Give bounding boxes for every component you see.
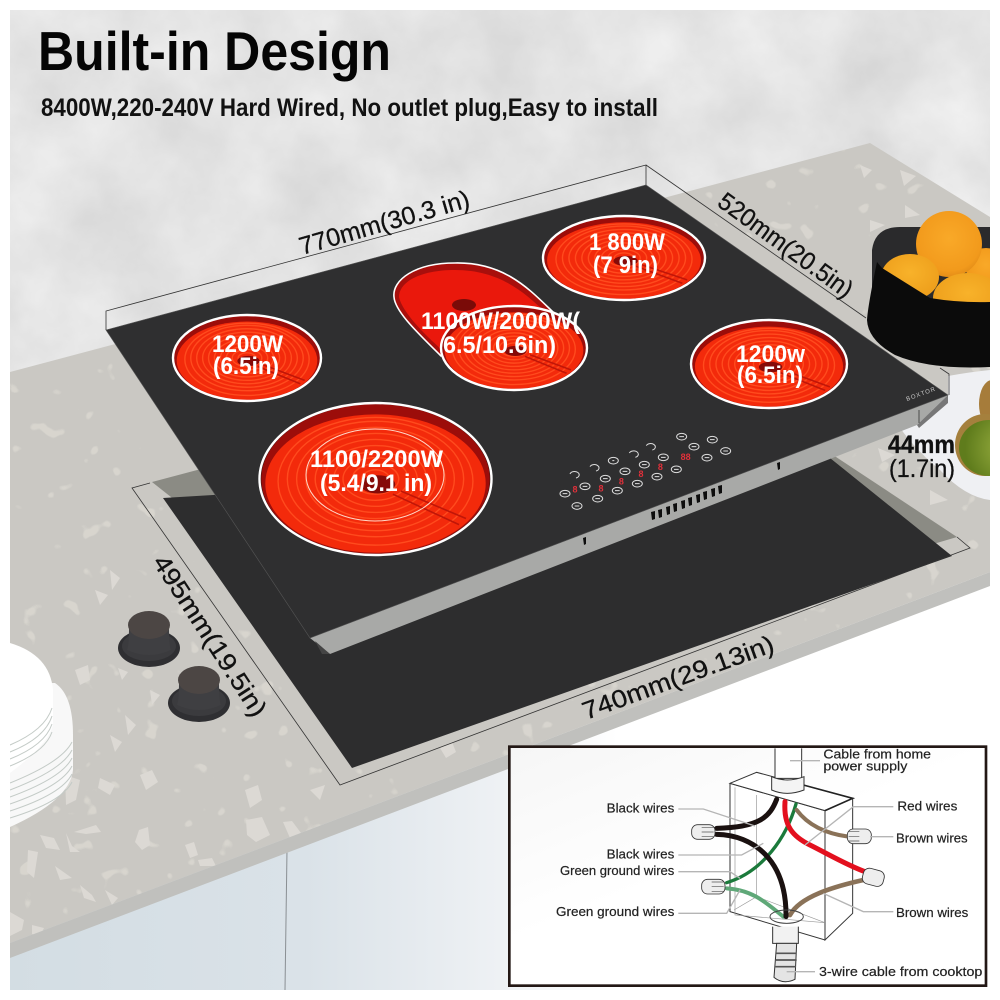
title: Built-in Design bbox=[38, 20, 391, 82]
wire nuts bbox=[692, 825, 886, 894]
burner: rear 1800W: (7 9in) bbox=[593, 252, 658, 279]
wiring labels: 3-wire cable from cooktop bbox=[819, 965, 982, 979]
floor clamp bbox=[770, 910, 803, 923]
dimension label: thickness 44mm: 44mm bbox=[888, 431, 955, 459]
touch control panel: 8 bbox=[572, 485, 577, 495]
wiring labels: power supply bbox=[823, 760, 908, 774]
wiring labels: Black wires bbox=[607, 848, 674, 862]
touch control panel: 8 bbox=[619, 476, 624, 486]
touch control panel: 8 bbox=[598, 483, 603, 493]
wiring labels: Brown wires bbox=[896, 832, 968, 846]
knob 1 bbox=[118, 611, 180, 667]
burner: centre dual 1100W/2000W: 1100W/2000W( bbox=[421, 308, 580, 335]
burner: front left 1100/2200W: 1100/2200W bbox=[310, 446, 443, 473]
burner: right 1200w: (6.5in) bbox=[737, 362, 803, 389]
cooktop glass bbox=[106, 185, 948, 638]
wires bbox=[717, 799, 865, 917]
dimension label: cutout depth 495mm: 495mm(19.5in) bbox=[147, 550, 272, 722]
subtitle: 8400W,220-240V Hard Wired, No outlet plug,Easy to install bbox=[41, 94, 658, 122]
burner: front left 1100/2200W: (5.4/9.1 in) bbox=[320, 470, 432, 497]
wiring labels bbox=[556, 747, 982, 979]
burner: rear left 1200W: 1200W bbox=[212, 331, 283, 358]
brand mark: BOXTOR bbox=[906, 387, 937, 403]
leader lines bbox=[678, 761, 893, 972]
dimension label: depth 520mm: 520mm(20.5in) bbox=[712, 187, 858, 304]
touch control panel: 8 bbox=[658, 462, 663, 472]
dimension label: thickness 44mm: (1.7in) bbox=[889, 455, 955, 483]
burner: rear 1800W: 1 800W bbox=[589, 229, 665, 256]
touch control panel bbox=[560, 433, 731, 509]
burner: centre dual 1100W/2000W bbox=[394, 263, 587, 390]
burner: right 1200w: 1200w bbox=[736, 341, 805, 368]
wall background bbox=[0, 0, 1000, 620]
dimension lines bbox=[106, 165, 970, 785]
burner: centre dual 1100W/2000W: 6.5/10.6in) bbox=[443, 332, 556, 359]
dimension label: cutout width 740mm: 740mm(29.13in) bbox=[578, 630, 778, 726]
wiring labels: Green ground wires bbox=[560, 864, 674, 878]
touch control panel: 88 bbox=[681, 452, 691, 462]
burner: rear 1800W bbox=[543, 216, 705, 300]
knob 2 bbox=[168, 666, 230, 722]
touch control panel: 8 bbox=[638, 469, 643, 479]
dimension label: width 770mm: 770mm(30.3 in) bbox=[296, 185, 473, 261]
vents bbox=[583, 462, 780, 545]
cooktop bbox=[106, 185, 948, 654]
wiring labels: Red wires bbox=[897, 800, 957, 814]
burner: rear left 1200W bbox=[173, 315, 321, 401]
wiring labels: Green ground wires bbox=[556, 905, 674, 919]
plate with kiwi fruit bbox=[895, 370, 1000, 500]
cabinet front below counter bbox=[10, 560, 990, 990]
dimension label: thickness 44mm bbox=[888, 431, 955, 483]
burner: right 1200w bbox=[691, 320, 847, 408]
wiring labels: Cable from home bbox=[823, 747, 931, 761]
panel: wiring diagram bbox=[509, 747, 986, 986]
burner: rear left 1200W: (6.5in) bbox=[213, 353, 279, 380]
junction box bbox=[730, 772, 853, 940]
bottom conduit bbox=[773, 927, 798, 982]
burner: front left 1100/2200W bbox=[260, 403, 492, 555]
top conduit bbox=[772, 748, 804, 793]
wiring labels: Brown wires bbox=[896, 906, 968, 920]
cutout opening in counter bbox=[152, 453, 957, 768]
fruit bowl with oranges bbox=[867, 211, 1000, 368]
stacked white plates bbox=[10, 643, 73, 827]
wiring labels: Black wires bbox=[607, 802, 674, 816]
cooktop underside band bbox=[310, 395, 948, 654]
